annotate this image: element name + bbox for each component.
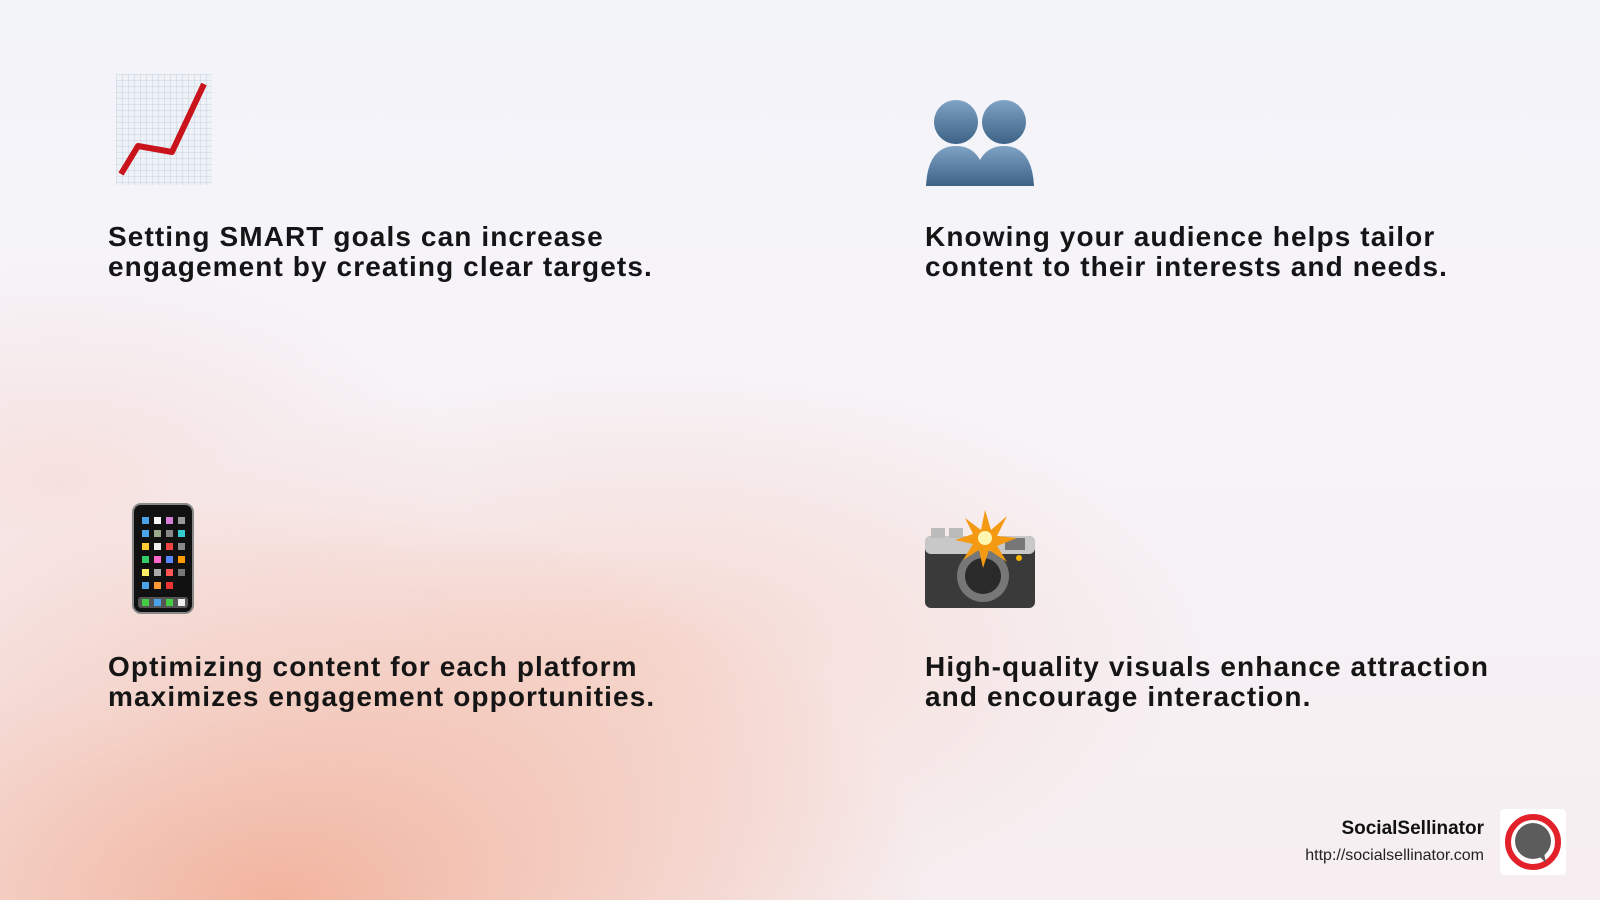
text: optimizing bbox=[108, 651, 655, 712]
text: visuals: High-quality visuals enhance attraction bbox=[925, 651, 1489, 682]
text: optimizing: Optimizing content for each platform bbox=[108, 651, 638, 682]
icon: chart increasing bbox=[116, 74, 212, 185]
text: visuals: and encourage interaction. bbox=[925, 681, 1311, 712]
text: SMART goals: engagement by creating clear targets. bbox=[108, 251, 653, 282]
text: audience: content to their interests and needs. bbox=[925, 251, 1448, 282]
text: visuals bbox=[925, 651, 1489, 712]
brand name: SocialSellinator bbox=[1341, 818, 1484, 839]
text: SMART goals: Setting SMART goals can increase bbox=[108, 221, 604, 252]
text: audience: Knowing your audience helps tailor bbox=[925, 221, 1435, 252]
icon: camera with flash bbox=[925, 510, 1035, 608]
logo bbox=[1500, 809, 1566, 875]
brand url: http://socialsellinator.com bbox=[1305, 847, 1484, 864]
brand block bbox=[1305, 818, 1484, 864]
icon: busts in silhouette bbox=[926, 100, 1034, 186]
text: audience bbox=[925, 221, 1448, 282]
icon: mobile phone bbox=[132, 503, 194, 614]
text: SMART goals bbox=[108, 221, 653, 282]
text: optimizing: maximizes engagement opportunities. bbox=[108, 681, 655, 712]
